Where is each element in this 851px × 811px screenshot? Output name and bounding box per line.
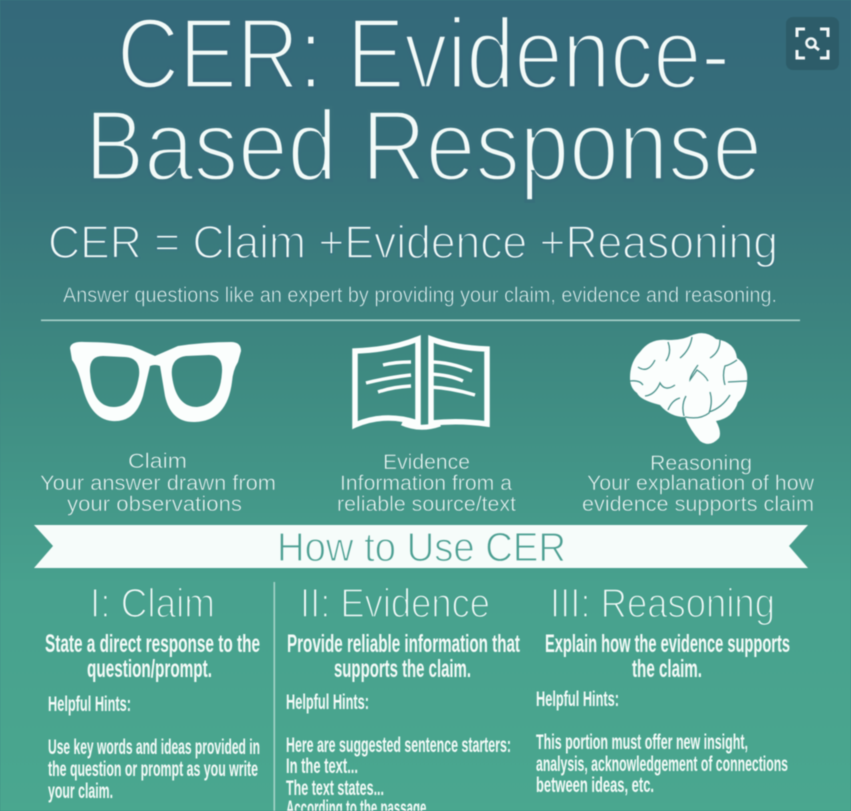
claim description: question/prompt. [87,655,212,683]
label: reasoning: evidence supports claim [582,493,814,516]
claim hints [48,693,260,803]
title: CER: Evidence- [117,0,730,110]
evidence description: supports the claim. [334,655,471,683]
subtitle: Answer questions like an expert by providing your claim, evidence and reasoning. [63,284,777,307]
evidence description: Provide reliable information that [287,630,520,658]
label: evidence: Information from a [340,472,512,495]
claim hints: Helpful Hints: [48,693,131,716]
label: claim [40,450,276,516]
label: reasoning: Reasoning [650,452,752,475]
column: claim [45,580,260,803]
label: reasoning [582,452,815,516]
formula heading: CER = Claim +Evidence +Reasoning [48,216,778,268]
column: reasoning [536,580,790,797]
evidence hints: In the text... [286,755,358,778]
reasoning description: the claim. [632,655,702,683]
evidence hints: Helpful Hints: [286,691,369,714]
banner [34,524,808,570]
reasoning hints [536,688,788,797]
evidence description [287,630,520,683]
heading: reasoning: III: Reasoning [550,580,775,626]
icon: glasses [70,342,241,422]
zoom button icon [786,17,839,70]
column: evidence [286,580,520,811]
label: evidence [337,451,516,516]
label: evidence: reliable source/text [337,493,516,516]
label: evidence: Evidence [383,451,470,474]
label: reasoning: Your explanation of how [587,472,815,495]
icon: open book [355,339,487,427]
evidence hints: The text states... [286,777,384,800]
icon: brain [630,333,747,444]
label: claim: Claim [128,450,187,473]
claim hints: Use key words and ideas provided in [48,736,260,759]
title [85,0,762,202]
banner: How to Use CER [277,524,566,570]
reasoning hints: Helpful Hints: [536,688,619,711]
heading: claim: I: Claim [90,580,215,626]
title: Based Response [85,90,762,202]
claim description: State a direct response to the [45,630,260,658]
reasoning hints: between ideas, etc. [536,774,654,797]
claim hints: the question or prompt as you write [48,758,258,781]
label: claim: your observations [67,493,242,516]
label: claim: Your answer drawn from [40,472,276,495]
reasoning description [545,630,790,683]
evidence hints [286,691,511,811]
claim hints: your claim. [48,780,113,803]
heading: evidence: II: Evidence [300,580,490,626]
evidence hints: Here are suggested sentence starters: [286,734,511,757]
claim description [45,630,260,683]
